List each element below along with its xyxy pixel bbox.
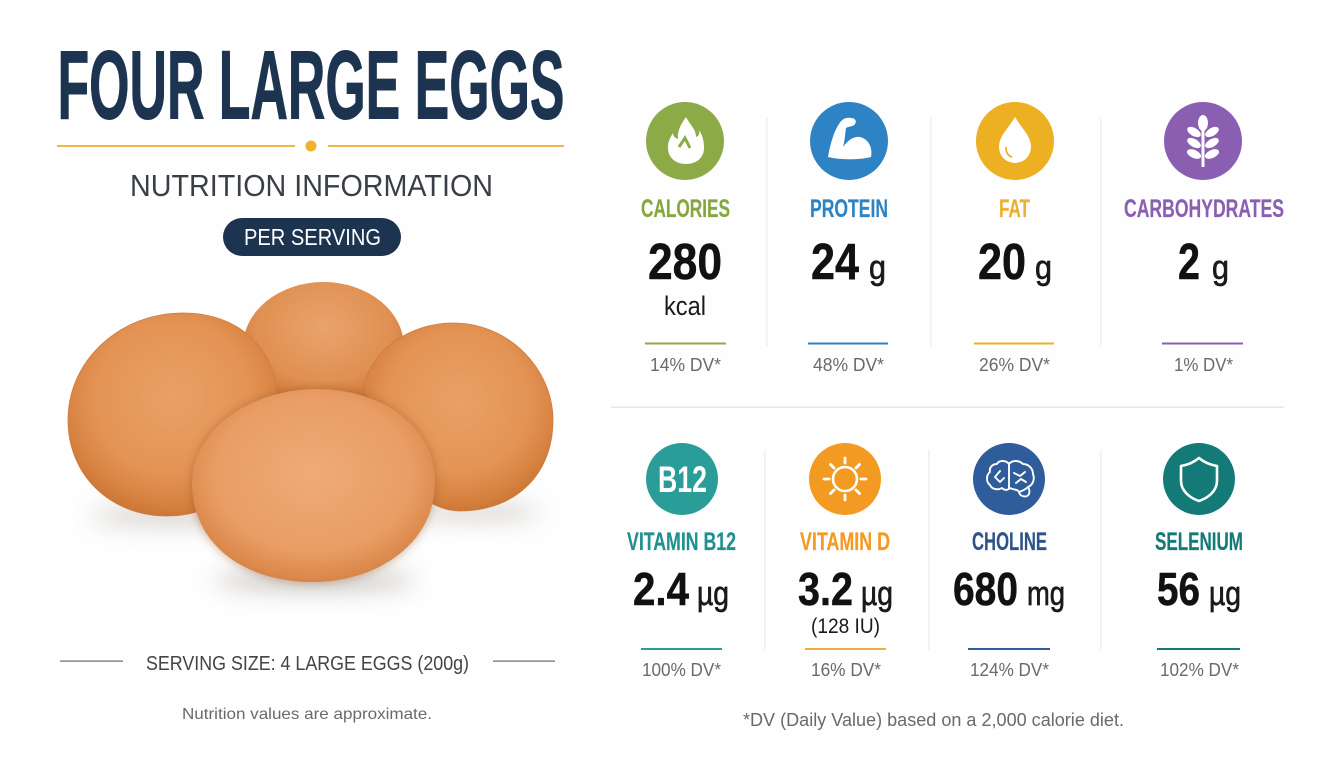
per serving pill: PER SERVING (244, 224, 381, 250)
value: 2.4 (633, 563, 689, 615)
value: 20 (978, 233, 1026, 290)
accent line (1162, 342, 1243, 344)
footnote: *DV (Daily Value) based on a 2,000 calorie diet. (743, 710, 1124, 730)
panel: choline (953, 443, 1065, 680)
panel: calories (641, 102, 730, 375)
value: 280 (648, 233, 722, 290)
panel: protein (808, 102, 888, 375)
accent line (805, 648, 886, 650)
accent line (645, 342, 726, 344)
unit: kcal (664, 291, 706, 321)
unit: g (869, 249, 886, 287)
icon: drop (976, 102, 1054, 180)
label: FAT (999, 195, 1030, 223)
daily value: 14% DV* (650, 355, 721, 375)
value: 3.2 (798, 563, 853, 615)
title: FOUR LARGE EGGS (58, 30, 564, 140)
accent line (1157, 648, 1240, 650)
icon: flexed arm (810, 102, 888, 180)
accent line (808, 342, 888, 344)
panel: vitamin d (798, 443, 893, 680)
label: CHOLINE (972, 528, 1047, 556)
daily value: 124% DV* (970, 660, 1049, 680)
icon: brain (973, 443, 1045, 515)
label: VITAMIN D (800, 528, 890, 556)
daily value: 1% DV* (1174, 355, 1233, 375)
icon: b12 badge (646, 443, 718, 515)
IU note: (128 IU) (811, 615, 880, 638)
value: 56 (1157, 563, 1200, 615)
daily value: 100% DV* (642, 660, 721, 680)
panel: fat (974, 102, 1054, 375)
value: 2 (1178, 233, 1200, 290)
accent line (974, 342, 1054, 344)
icon: wheat (1164, 102, 1242, 180)
label: SELENIUM (1155, 528, 1243, 556)
daily value: 48% DV* (813, 355, 884, 375)
panel: selenium (1155, 443, 1243, 680)
icon: flame (646, 102, 724, 180)
unit: g (1035, 249, 1052, 287)
label: VITAMIN B12 (627, 528, 736, 556)
label: PROTEIN (810, 195, 888, 223)
daily value: 102% DV* (1160, 660, 1239, 680)
approximate note: Nutrition values are approximate. (182, 706, 432, 723)
value: 680 (953, 563, 1018, 615)
icon: shield (1163, 443, 1235, 515)
panel: title and eggs (57, 30, 564, 723)
title divider with dot (57, 140, 564, 152)
unit: µg (861, 575, 893, 613)
accent line (641, 648, 722, 650)
unit: mg (1027, 575, 1065, 613)
unit: µg (1209, 575, 1241, 613)
per serving pill (223, 218, 401, 256)
icon: b12 badge: B12 (658, 459, 707, 500)
unit: µg (697, 575, 729, 613)
label: CALORIES (641, 195, 730, 223)
eggs photo (68, 282, 553, 588)
value: 24 (811, 233, 860, 290)
icon: sun (809, 443, 881, 515)
panel: vitamin b12 (627, 443, 736, 680)
daily value: 16% DV* (811, 660, 881, 680)
unit: g (1212, 249, 1229, 287)
serving size: SERVING SIZE: 4 LARGE EGGS (200g) (146, 653, 469, 675)
subtitle: NUTRITION INFORMATION (130, 168, 493, 203)
grid dividers (611, 118, 1284, 650)
accent line (968, 648, 1050, 650)
panel: carbohydrates (1124, 102, 1284, 375)
daily value: 26% DV* (979, 355, 1050, 375)
